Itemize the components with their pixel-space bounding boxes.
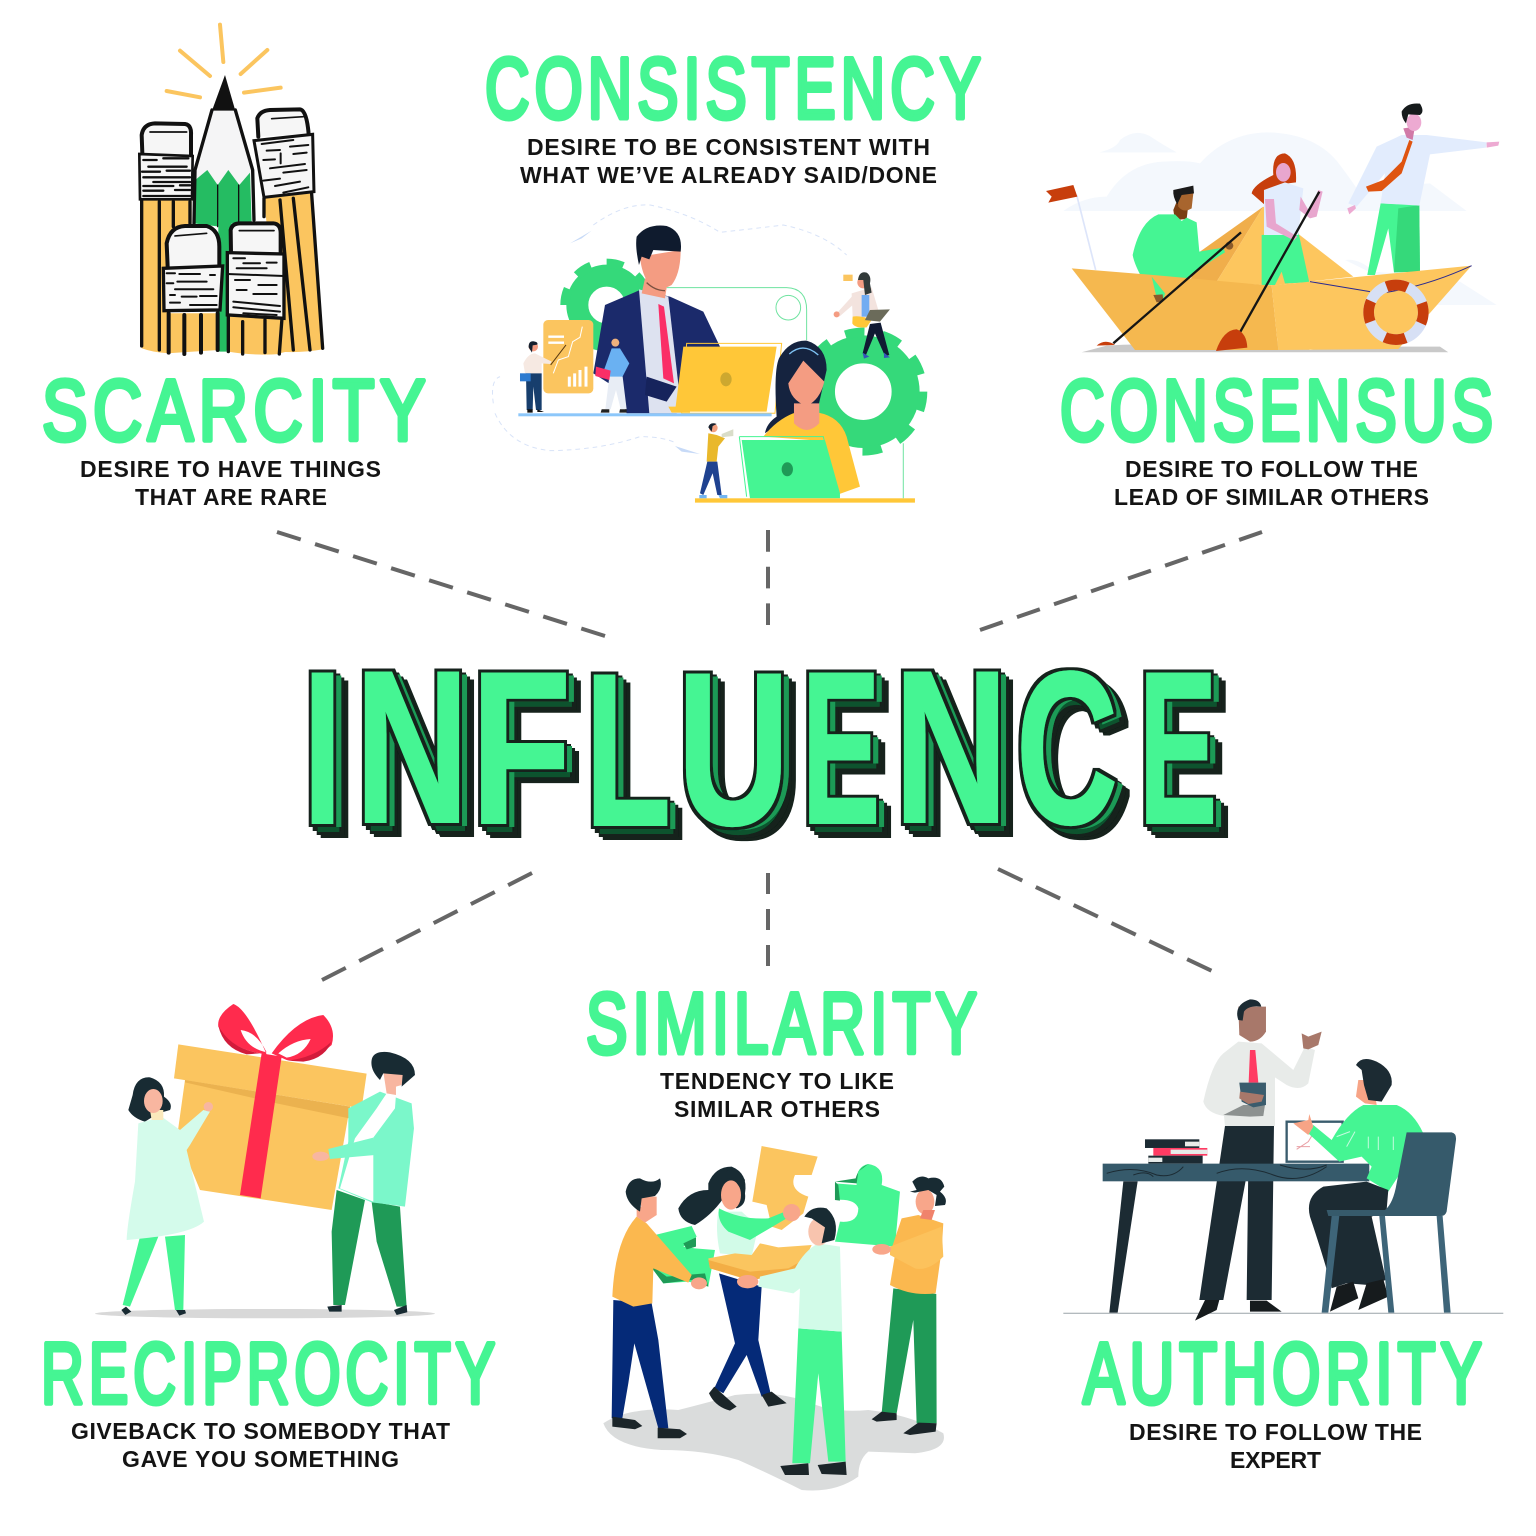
central title: INFLUENCE: N [894, 626, 1008, 869]
books [1145, 1139, 1207, 1164]
central title: INFLUENCE: F [471, 627, 571, 869]
text: authority description: DESIRE TO FOLLOW THE [1129, 1419, 1422, 1445]
presenter figure [520, 341, 552, 413]
text: consistency description: DESIRE TO BE CONSISTENT WITH [527, 134, 930, 160]
illustration: reciprocity gift [95, 1004, 435, 1318]
puzzle: yellow upper [752, 1146, 818, 1230]
man centre back [737, 1208, 847, 1475]
blue shirt figure [595, 339, 629, 413]
text: consistency description: WHAT WE’VE ALREADY SAID/DONE [520, 162, 937, 188]
text: reciprocity description [71, 1418, 450, 1472]
rower: woman [1252, 153, 1323, 285]
heading: reciprocity: RECIPROCITY [41, 1326, 500, 1422]
heading: scarcity: SCARCITY [42, 363, 431, 459]
puzzle: green left [648, 1226, 715, 1287]
desk [1103, 1164, 1369, 1313]
woman [121, 1077, 213, 1316]
woman on gear with laptop [834, 272, 890, 359]
illustration: similarity puzzle team [603, 1146, 946, 1491]
puzzle: yellow centre [708, 1243, 812, 1280]
oars [1097, 192, 1319, 351]
gear: right [804, 332, 923, 451]
text: consensus description: LEAD OF SIMILAR OTHERS [1114, 484, 1429, 510]
text: similarity description: SIMILAR OTHERS [674, 1096, 880, 1122]
desk laptop [1287, 1122, 1343, 1162]
chair [1322, 1132, 1456, 1313]
rower: man pointing [1347, 103, 1499, 275]
illustration: consensus paper boat [1046, 103, 1499, 352]
text: similarity description [660, 1068, 894, 1122]
gear: left [565, 263, 648, 347]
central title: INFLUENCE: C [1016, 626, 1118, 869]
heading: consistency: CONSISTENCY [485, 41, 986, 137]
icon: scarcity pencils [139, 25, 323, 355]
gift box [174, 1004, 367, 1210]
central title: INFLUENCE: E [802, 626, 880, 869]
woman [678, 1167, 800, 1411]
man [312, 1052, 415, 1315]
man right [872, 1176, 946, 1435]
text: scarcity description: DESIRE TO HAVE THINGS [80, 456, 381, 482]
text: scarcity description: THAT ARE RARE [135, 484, 327, 510]
text: authority description: EXPERT [1230, 1447, 1321, 1473]
text: reciprocity description: GAVE YOU SOMETHING [122, 1446, 399, 1472]
rower: left [1133, 186, 1233, 295]
illustration: authority meeting at desk [1063, 999, 1503, 1321]
text: scarcity description [80, 456, 381, 510]
man left [612, 1178, 707, 1438]
illustration: consistency team at laptops [492, 205, 923, 503]
flag [1046, 185, 1096, 270]
text: consensus description [1114, 456, 1429, 510]
central title: INFLUENCE: I [303, 626, 342, 869]
man in suit [593, 226, 720, 413]
woman with laptop [695, 341, 915, 503]
central title: INFLUENCE: E [1139, 626, 1217, 869]
central title: INFLUENCE [303, 626, 1217, 871]
seated man [1293, 1059, 1423, 1312]
standing man [1195, 999, 1322, 1321]
chart card [543, 320, 593, 393]
life ring [1369, 285, 1423, 340]
sail [1190, 207, 1353, 286]
text: consensus description: DESIRE TO FOLLOW THE [1125, 456, 1418, 482]
text: similarity description: TENDENCY TO LIKE [660, 1068, 894, 1094]
text: reciprocity description: GIVEBACK TO SOMEBODY THAT [71, 1418, 450, 1444]
boat hull [1072, 266, 1472, 350]
central title: INFLUENCE: N [355, 626, 469, 869]
central title: INFLUENCE: U [677, 628, 790, 871]
text: authority description [1129, 1419, 1422, 1473]
central title: INFLUENCE: L [585, 628, 671, 871]
puzzle: green right [835, 1164, 900, 1247]
text: consistency description [520, 134, 937, 188]
laptop: yellow [668, 343, 782, 413]
connector lines [277, 530, 1262, 980]
megaphone figure [699, 423, 733, 498]
heading: similarity: SIMILARITY [586, 976, 982, 1072]
